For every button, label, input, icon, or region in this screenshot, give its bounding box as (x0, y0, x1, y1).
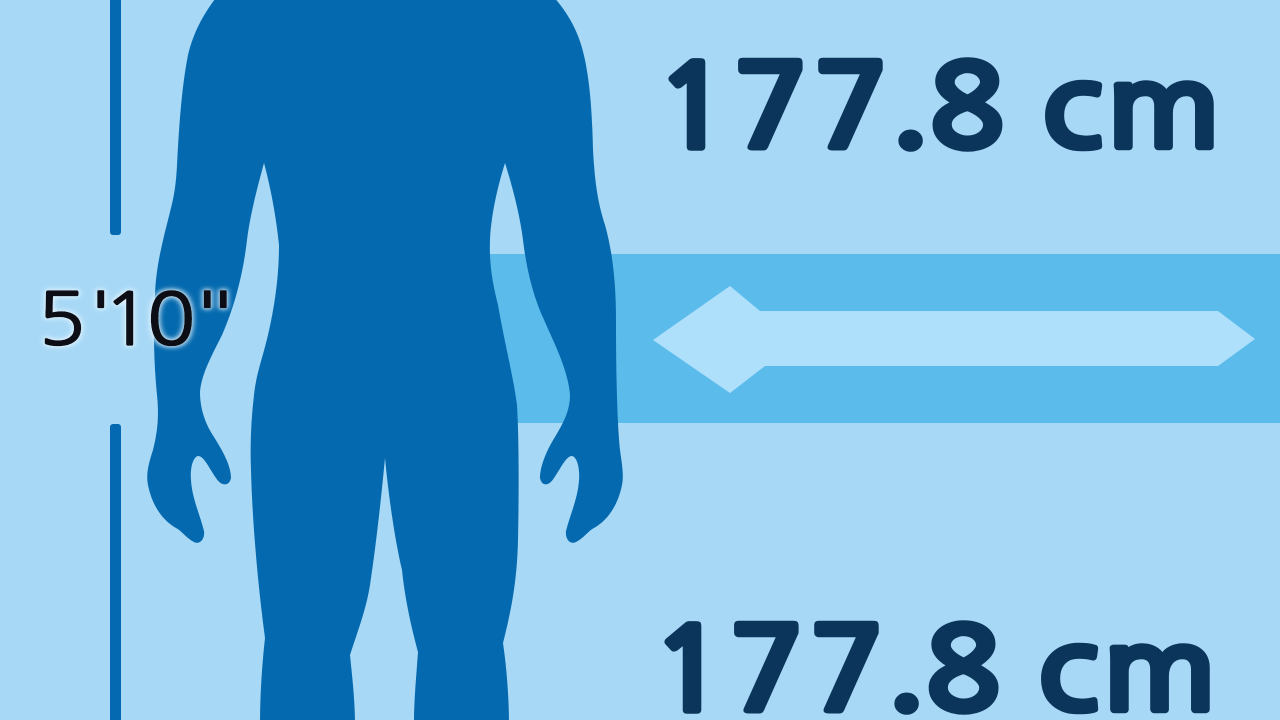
label: height in feet and inches: 5'10'' (37, 285, 235, 356)
arrow: double-headed pointer (653, 286, 1255, 393)
height ruler line (110, 0, 121, 720)
icon: human body silhouette (147, 0, 623, 720)
horizontal measurement band (490, 254, 1280, 423)
heading: top centimetre value: 177.8 cm (655, 45, 1221, 166)
